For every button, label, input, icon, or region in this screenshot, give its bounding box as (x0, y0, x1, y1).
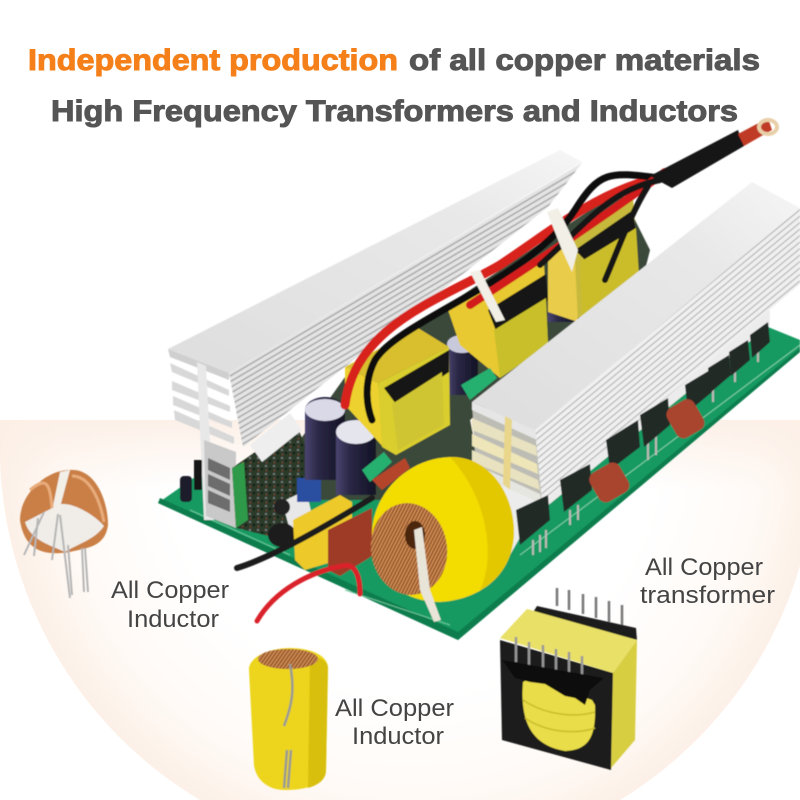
title line 1: Independent production (28, 44, 398, 77)
red wire (257, 565, 360, 621)
black wire (237, 498, 372, 568)
title line 2: High Frequency Transformers and Inductors (51, 95, 738, 128)
front pins (516, 637, 582, 686)
green control board (180, 413, 321, 547)
transformer 2 on board (447, 262, 548, 378)
transformer 1 on board (345, 328, 450, 455)
label: all copper transformer: All Copper (645, 554, 763, 581)
yellow box capacitor (293, 495, 352, 570)
red film capacitor (328, 508, 372, 576)
all-copper transformer component (500, 588, 637, 770)
label: all copper inductor (left): Inductor (127, 606, 219, 633)
inverter circuit board assembly (158, 118, 800, 640)
cable ties (470, 208, 578, 322)
label: all copper inductor (centre): Inductor (352, 723, 444, 750)
left heat sink (168, 150, 582, 528)
label: all copper inductor (centre) (335, 695, 454, 750)
label: all copper inductor (left) (111, 577, 229, 633)
white metal base under right heat sink (490, 310, 770, 555)
capacitors (305, 267, 577, 495)
main cable sleeve and terminal (650, 118, 777, 188)
yellow cylinder inductor (249, 648, 328, 790)
green circuit board (158, 327, 800, 640)
green fuses (362, 332, 592, 490)
dark interior between heat sinks (300, 190, 650, 500)
label: all copper inductor (left): All Copper (111, 577, 229, 604)
rear pins (557, 588, 622, 626)
main yellow toroid inductor (365, 457, 514, 622)
label: all copper transformer: transformer (640, 582, 775, 609)
power transistors and red film capacitors (516, 322, 770, 555)
background: peach circular glow (0, 420, 800, 800)
left all-copper toroid inductor (20, 470, 108, 598)
title (28, 44, 760, 128)
right heat sink (472, 182, 800, 504)
wiring harness (345, 172, 665, 420)
title line 1: of all copper materials (409, 44, 760, 77)
title line 1 (28, 44, 760, 77)
label: all copper transformer (640, 554, 775, 609)
label: all copper inductor (centre): All Copper (335, 695, 454, 722)
transformer 3 on board (548, 198, 640, 330)
